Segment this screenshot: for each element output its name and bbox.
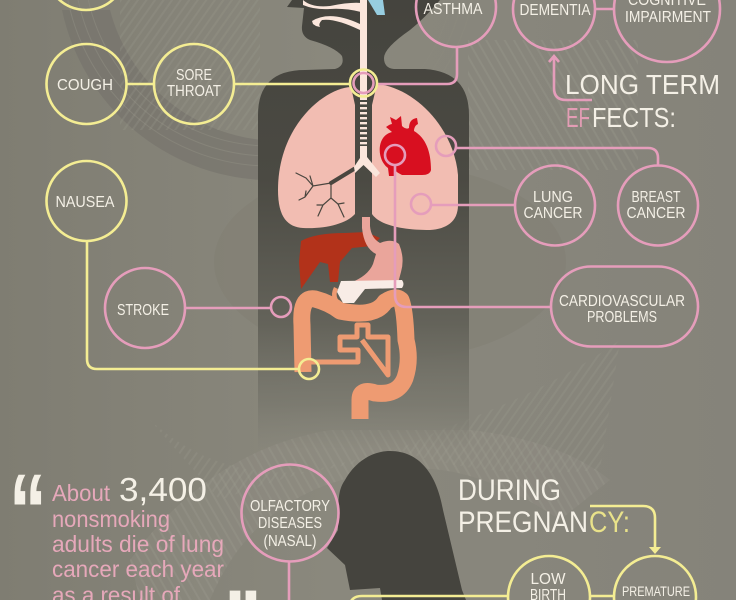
stroke node: STROKE <box>117 302 169 319</box>
nausea node <box>46 161 126 241</box>
cardiovascular problems node <box>551 266 698 346</box>
low birth node <box>350 556 590 600</box>
stroke node <box>105 268 185 348</box>
low birth node: LOW <box>530 571 566 588</box>
marker: lung <box>411 194 431 214</box>
quote: 3,400 nonsmoking adults: cancer each year <box>52 556 224 582</box>
marker: throat inner <box>354 73 374 93</box>
quote: 3,400 nonsmoking adults: About <box>52 480 111 506</box>
heading: during pregnancy: PREGNAN <box>458 506 588 539</box>
heading: long term effects: LONG TERM <box>565 69 720 100</box>
olfactory diseases node: (NASAL) <box>264 533 316 550</box>
sore throat node: THROAT <box>167 83 221 100</box>
breast cancer node <box>618 166 698 246</box>
cognitive impairment node <box>614 0 720 62</box>
opening quote mark: “ <box>9 453 47 570</box>
marker: brain <box>271 297 291 317</box>
quote: 3,400 nonsmoking adults <box>9 453 262 600</box>
intestines <box>302 288 408 419</box>
line: breast cancer <box>456 148 658 165</box>
premature node: PREMATURE <box>622 583 690 599</box>
dementia node <box>513 0 595 50</box>
marker: throat <box>350 70 377 96</box>
asthma node: ASTHMA <box>424 1 483 18</box>
asthma node <box>416 0 496 47</box>
upper body silhouette <box>258 0 469 450</box>
breast cancer node: CANCER <box>626 205 686 222</box>
connector lines <box>87 9 661 596</box>
olfactory diseases node: DISEASES <box>258 515 322 532</box>
line: sore throat to throat <box>127 83 349 85</box>
line: low birth to premature <box>590 595 615 597</box>
top left circle <box>46 0 126 10</box>
nausea node: NAUSEA <box>56 194 115 211</box>
stomach <box>350 217 403 283</box>
breast cancer node: BREAST <box>632 189 681 206</box>
arrowhead: during pregnancy <box>649 547 661 554</box>
lower silhouette: pregnant woman <box>327 451 466 600</box>
sore throat node <box>154 44 234 124</box>
arrow: during pregnancy <box>590 506 655 550</box>
left lung <box>278 87 355 228</box>
quote: 3,400 nonsmoking adults: nonsmoking <box>52 506 170 532</box>
olfactory diseases node: OLFACTORY <box>250 498 330 515</box>
marker: heart <box>385 145 405 165</box>
heading: during pregnancy <box>458 474 630 539</box>
organ markers <box>271 70 456 379</box>
heading: during pregnancy: CY: <box>589 506 630 539</box>
sore throat node: SORE <box>176 67 212 84</box>
lung cancer node: CANCER <box>524 205 582 222</box>
line: dementia to cognitive impairment <box>595 8 614 10</box>
line: asthma to throat <box>377 47 457 84</box>
cough node <box>46 44 126 124</box>
quote: 3,400 nonsmoking adults: adults die of lung <box>52 531 224 557</box>
liver <box>299 232 380 289</box>
olfactory diseases node <box>242 464 338 600</box>
heading: long term effects: EF <box>566 102 590 133</box>
line: nausea to intestines <box>87 241 299 369</box>
quote: 3,400 nonsmoking adults: 3,400 <box>119 471 207 508</box>
cardiovascular problems node: CARDIOVASCULAR <box>559 293 685 310</box>
bronchial tree <box>296 169 354 217</box>
marker: intestine <box>299 359 319 379</box>
cognitive impairment node: IMPAIRMENT <box>625 9 711 26</box>
lung cancer node: LUNG <box>533 189 573 206</box>
dementia node: DEMENTIA <box>520 2 591 19</box>
heading: during pregnancy: DURING <box>458 474 561 507</box>
lungs <box>278 84 458 230</box>
lung cancer node <box>515 166 595 246</box>
airway and trachea <box>303 0 385 177</box>
line: stroke to brain marker <box>186 307 271 309</box>
cardiovascular problems node: PROBLEMS <box>587 309 657 326</box>
heading: long term effects: FECTS: <box>592 102 676 133</box>
pancreas <box>337 280 404 303</box>
cough node: COUGH <box>57 77 113 94</box>
marker: breast <box>436 136 456 156</box>
premature node <box>614 556 696 600</box>
line: cardiovascular <box>395 165 550 307</box>
right lung <box>372 84 458 230</box>
arrow: long term effects <box>549 56 592 100</box>
heading: long term effects <box>565 69 720 133</box>
line: lung cancer <box>431 204 514 206</box>
heart <box>380 116 431 176</box>
